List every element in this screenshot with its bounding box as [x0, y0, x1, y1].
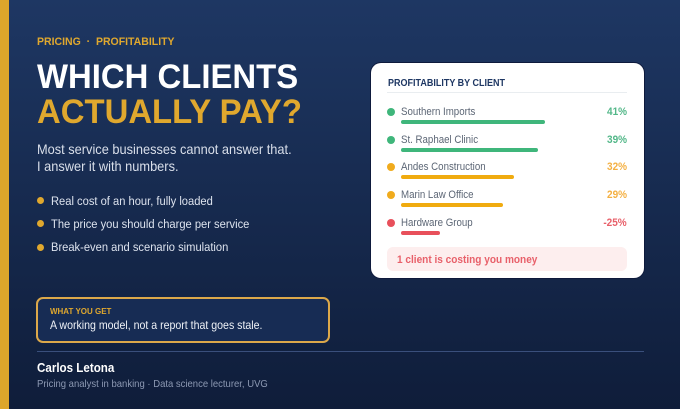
bullet 1 — [37, 197, 44, 204]
row: St. Raphael Clinic — [387, 134, 627, 152]
subtitle: I answer it with numbers. — [37, 158, 179, 174]
client name: Southern Imports — [401, 106, 475, 118]
item 3: Break-even and scenario simulation — [51, 240, 228, 254]
title: WHICH CLIENTS — [37, 58, 298, 96]
bar — [401, 175, 514, 179]
alert callout — [387, 247, 627, 271]
bar — [401, 203, 503, 207]
bullet 2 — [37, 220, 44, 227]
status dot — [387, 163, 395, 171]
callout label: WHAT YOU GET — [50, 306, 111, 316]
benefits list — [37, 194, 249, 254]
panel heading: PROFITABILITY BY CLIENT — [388, 78, 505, 89]
row: Marin Law Office — [387, 189, 627, 207]
status dot — [387, 219, 395, 227]
client name: Hardware Group — [401, 217, 473, 229]
author role: Pricing analyst in banking · Data science lecturer, UVG — [37, 378, 268, 390]
value: -25% — [604, 217, 627, 229]
value: 39% — [607, 134, 627, 146]
title: ACTUALLY PAY? — [37, 92, 302, 130]
eyebrow label: PRICING · PROFITABILITY — [37, 36, 175, 48]
callout text: A working model, not a report that goes stale. — [50, 319, 262, 332]
status dot — [387, 108, 395, 116]
client name: Marin Law Office — [401, 189, 474, 201]
value: 41% — [607, 106, 627, 118]
title — [37, 58, 302, 130]
value: 29% — [607, 189, 627, 201]
bar — [401, 148, 538, 152]
item 2: The price you should charge per service — [51, 217, 249, 231]
client name: Andes Construction — [401, 161, 486, 173]
accent stripe — [0, 0, 9, 409]
bar — [401, 120, 545, 124]
status dot — [387, 136, 395, 144]
client name: St. Raphael Clinic — [401, 134, 478, 146]
alert text: 1 client is costing you money — [397, 254, 537, 266]
bar — [401, 231, 440, 235]
row: Andes Construction — [387, 161, 627, 179]
panel: profitability by client — [371, 63, 644, 278]
subtitle: Most service businesses cannot answer that. — [37, 140, 292, 156]
row: Southern Imports — [387, 106, 627, 124]
bullet 3 — [37, 244, 44, 251]
status dot — [387, 191, 395, 199]
row: Hardware Group — [387, 217, 627, 235]
item 1: Real cost of an hour, fully loaded — [51, 194, 213, 208]
author name: Carlos Letona — [37, 360, 114, 375]
callout: what you get — [36, 297, 330, 343]
subtitle — [37, 140, 292, 174]
value: 32% — [607, 161, 627, 173]
